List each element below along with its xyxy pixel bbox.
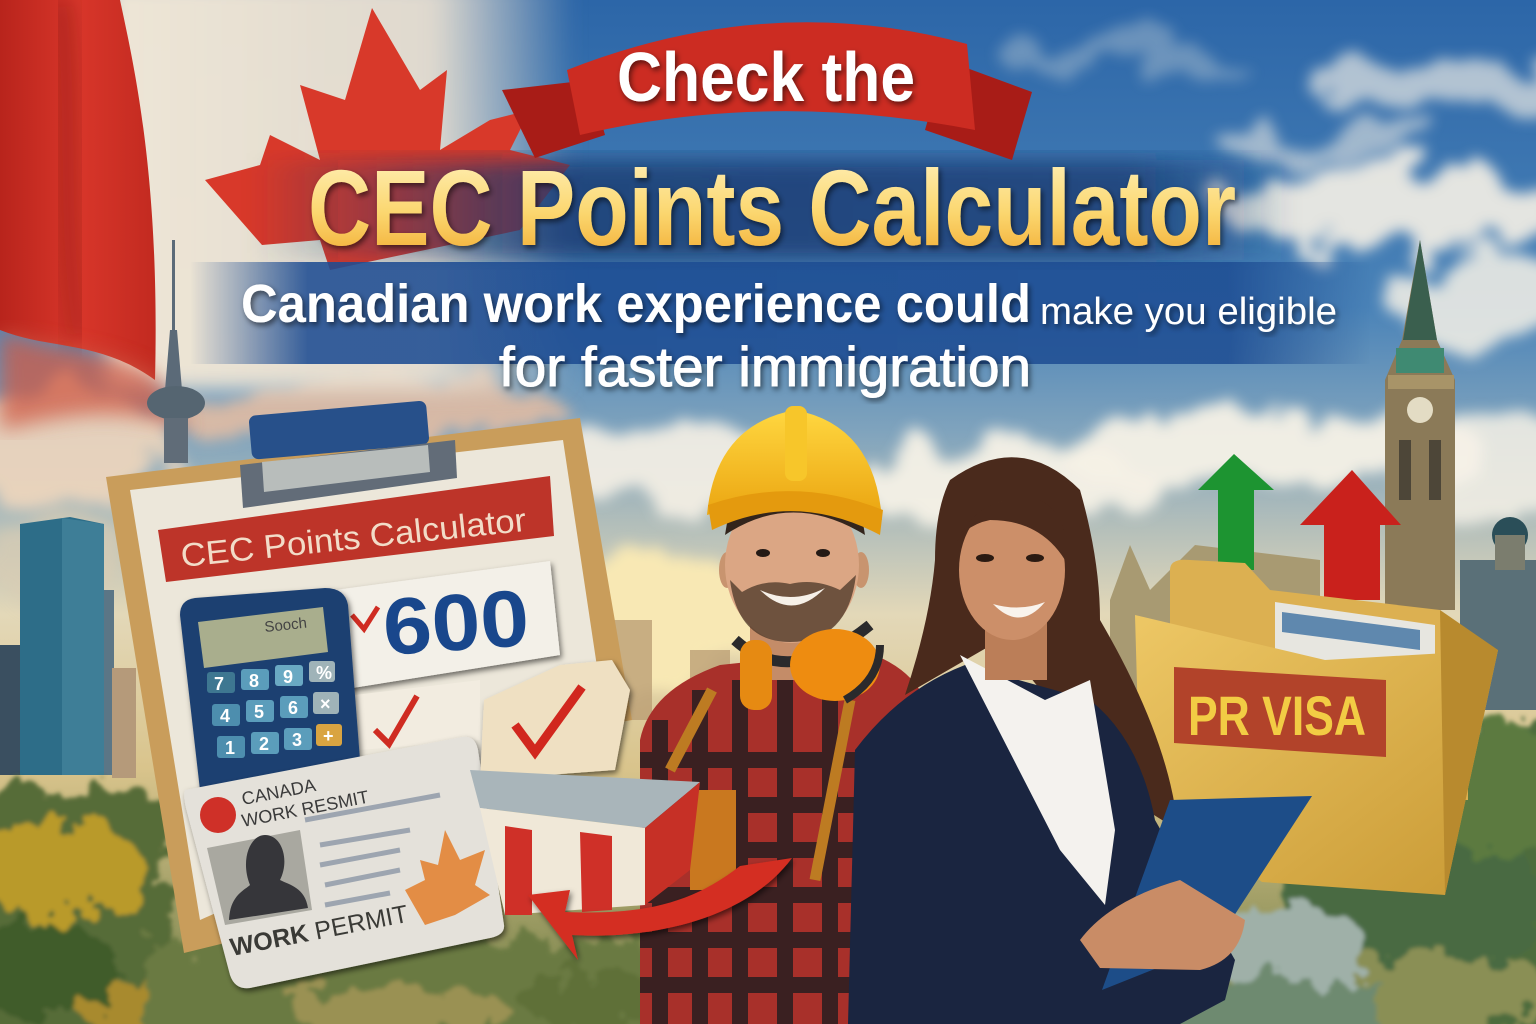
calculator: 5 [254,702,264,722]
subtitle: make you eligible [1040,291,1337,333]
small checked note [355,680,480,750]
ear defenders [735,625,880,710]
green up arrow [1198,454,1274,570]
hair [905,457,1178,830]
blue folder held [1102,796,1312,990]
PR visa folder [1135,560,1498,895]
businesswoman [848,457,1312,1024]
calculator: 4 [220,706,230,726]
woman face [955,498,1066,680]
calculator: % [316,663,332,683]
hand [1080,880,1245,970]
calculator: 1 [225,738,235,758]
CN tower [147,240,205,463]
calculator: 9 [283,667,293,687]
worker face [719,487,869,680]
subtitle [241,274,1337,398]
main title: CEC Points Calculator [308,147,1236,268]
calculator: 7 [214,674,224,694]
calculator: 6 [288,698,298,718]
subtitle blue band [190,262,1370,364]
work permit card: WORK PERMIT [228,900,410,962]
ribbon: Check the [502,22,1032,160]
worker shirt [640,650,925,1024]
title backdrop [250,160,1290,260]
calculator: Sooch [264,615,308,636]
icon: card maple leaf [405,830,490,925]
subtitle: for faster immigration [499,335,1031,398]
calculator: × [320,694,331,714]
icon: permit emblem [200,797,236,833]
worker [640,406,925,1024]
clouds [0,44,1536,690]
blouse [960,655,1115,905]
score card: 600 [380,573,532,672]
clipboard heading banner [158,476,554,582]
Canadian flag [0,0,575,430]
skyline center [612,620,730,720]
blazer [848,665,1235,1024]
red circular arrow [528,858,792,960]
calculator: 3 [292,730,302,750]
clipboard clip [240,400,457,508]
photo placeholder [207,830,312,925]
work permit card: WORK RESMIT [240,787,370,831]
calculator [180,588,360,790]
ballot box [470,660,700,915]
text: Check the: Check the [617,38,915,116]
skyline left [0,517,136,778]
calculator: + [323,726,334,746]
calculator: 8 [249,671,259,691]
calculator: 2 [259,734,269,754]
PR visa label [1174,667,1386,757]
icon: maple leaf [205,8,570,270]
worker helmet [707,406,883,535]
clipboard [106,400,632,953]
clipboard heading banner: CEC Points Calculator [179,501,528,574]
work permit card: CANADA [240,775,317,809]
red up arrow [1300,470,1401,600]
score card [335,561,560,690]
trees and foreground foliage [0,720,1536,1024]
parliament buildings [1110,240,1536,720]
PR visa label: PR VISA [1188,684,1366,747]
subtitle: Canadian work experience could [241,274,1031,334]
work permit card [184,737,504,988]
